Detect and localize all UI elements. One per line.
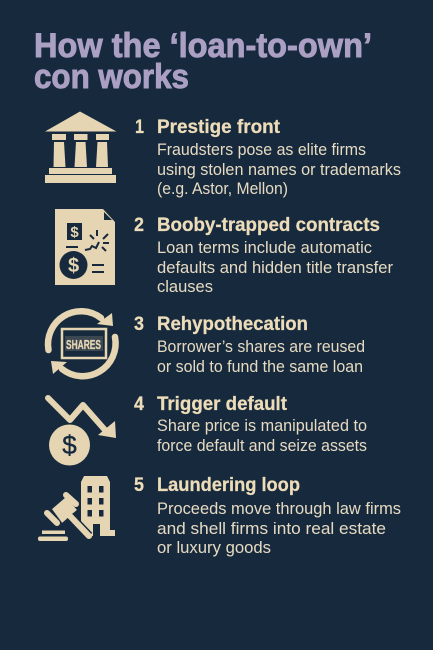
item 4: trigger default: Share price is manipulated to	[157, 416, 367, 435]
item 2: booby-trapped contracts	[134, 215, 393, 296]
icon: gavel and office building	[38, 476, 115, 541]
item 2: booby-trapped contracts: defaults and hidden title transfer	[157, 258, 393, 277]
item 3: rehypothecation: 3	[134, 314, 144, 335]
item 5: laundering loop: 5	[134, 475, 144, 496]
item 4: trigger default: force default and seize assets	[157, 436, 367, 455]
item 3: rehypothecation: or sold to fund the same loan	[157, 357, 363, 376]
item 1: prestige front: using stolen names or trademarks	[157, 160, 401, 179]
item 1: prestige front: (e.g. Astor, Mellon)	[157, 179, 288, 198]
title	[34, 27, 372, 96]
item 4: trigger default: Trigger default	[157, 394, 288, 415]
icon: shares recycling arrows: SHARES	[66, 338, 101, 352]
icon: shares recycling arrows	[48, 311, 116, 376]
item 1: prestige front: Prestige front	[157, 117, 281, 138]
item 5: laundering loop: Laundering loop	[157, 475, 300, 496]
icon: falling price arrow and coin	[48, 398, 116, 466]
icon: contract document with bomb: $	[70, 224, 79, 241]
title: How the ‘loan-to-own’	[34, 27, 372, 65]
item 5: laundering loop	[134, 475, 401, 557]
title: con works	[34, 58, 189, 96]
item 3: rehypothecation	[134, 314, 365, 376]
icon: bank building	[45, 112, 116, 183]
item 1: prestige front: Fraudsters pose as elite firms	[157, 140, 366, 159]
item 5: laundering loop: or luxury goods	[157, 538, 271, 557]
icon: contract document with bomb	[55, 209, 115, 285]
item 3: rehypothecation: Borrower’s shares are reused	[157, 337, 365, 356]
item 3: rehypothecation: Rehypothecation	[157, 314, 308, 335]
item 1: prestige front	[135, 117, 401, 198]
item 5: laundering loop: and shell firms into real estate	[157, 519, 386, 538]
item 4: trigger default	[134, 394, 367, 455]
item 1: prestige front: 1	[135, 117, 144, 138]
item 2: booby-trapped contracts: Loan terms include automatic	[157, 238, 372, 257]
item 2: booby-trapped contracts: clauses	[157, 277, 213, 296]
item 5: laundering loop: Proceeds move through law firms	[157, 499, 401, 518]
item 4: trigger default: 4	[134, 394, 144, 415]
item 2: booby-trapped contracts: Booby-trapped contracts	[157, 215, 380, 236]
icon: contract document with bomb: $	[68, 255, 79, 277]
item 2: booby-trapped contracts: 2	[134, 215, 144, 236]
icon: falling price arrow and coin: $	[62, 430, 77, 460]
